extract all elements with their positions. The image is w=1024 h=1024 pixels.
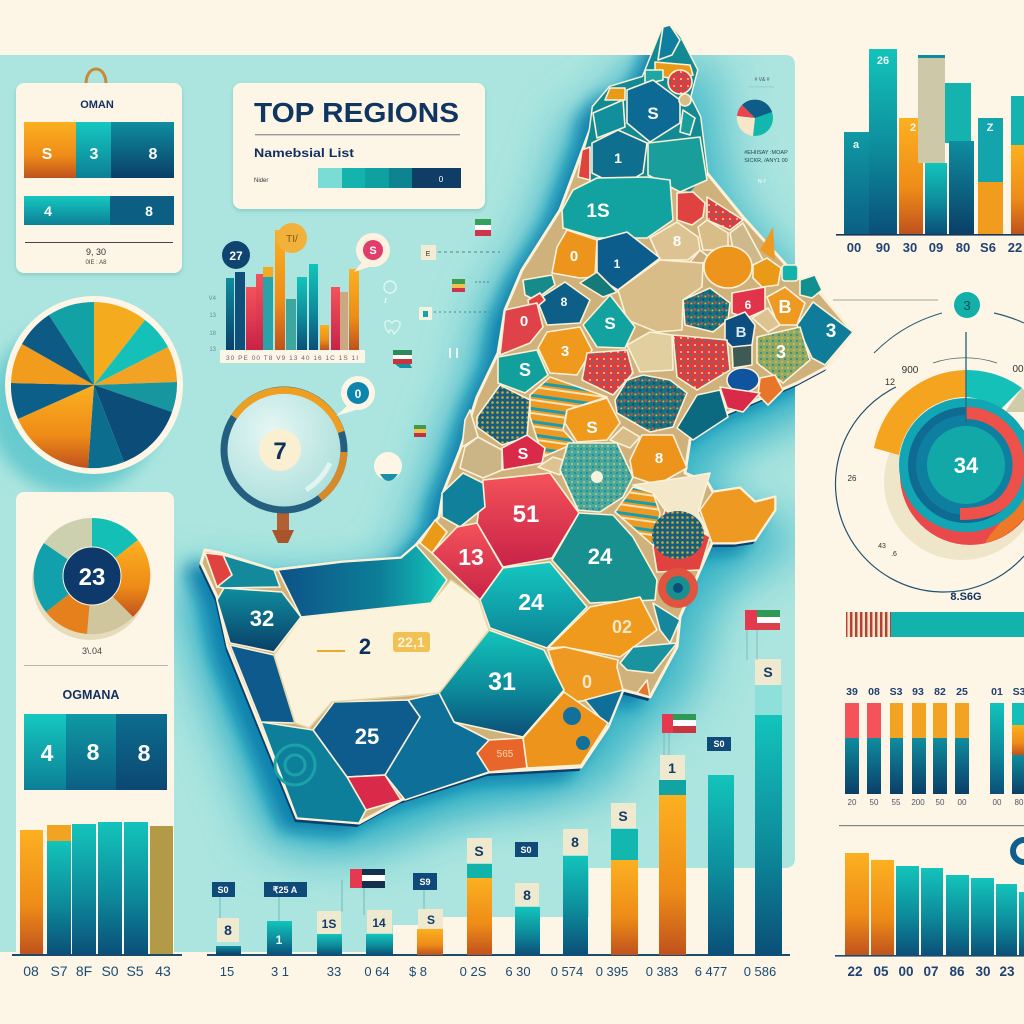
axis labels: 6 477 — [695, 964, 727, 979]
bar chart: top right: 30 — [903, 240, 917, 255]
donut caption: 3\.04 — [82, 646, 102, 656]
hook — [86, 69, 106, 84]
region numbers: S — [518, 446, 529, 463]
region numbers: 32 — [250, 606, 274, 631]
stacked columns: 80 — [1015, 798, 1024, 807]
stacked bar 2: 4 — [44, 203, 52, 219]
bubble: magnifier value: 0 — [355, 387, 362, 401]
card: Oman — [16, 69, 182, 273]
region numbers: 1 — [614, 257, 621, 271]
bar chart: bottom right: 00 — [898, 964, 914, 979]
small pie, top right of panel: N-7 — [758, 179, 766, 185]
stacked columns: 200 — [911, 798, 925, 807]
bar chart: bottom right: 30 — [975, 964, 991, 979]
region numbers: 31 — [488, 668, 516, 696]
value labels: 8 — [571, 834, 579, 850]
bubble: magnifier value — [336, 376, 375, 416]
region numbers: 02 — [612, 617, 632, 637]
region numbers: B — [736, 324, 747, 341]
region numbers: S — [586, 418, 598, 437]
stacked columns: 39 — [846, 686, 858, 698]
region numbers: 8 — [673, 233, 681, 250]
gold tag in central region: 22,1 — [397, 634, 425, 650]
axis labels — [220, 964, 776, 979]
bar chart: top right: S6 — [980, 240, 996, 255]
badge: 3 — [963, 298, 971, 313]
region numbers: S — [604, 314, 616, 333]
stacked columns: 50 — [936, 798, 945, 807]
region numbers: 3 — [776, 342, 786, 362]
map shadow — [173, 37, 879, 849]
circle marker — [1013, 840, 1024, 862]
region numbers: S — [647, 104, 659, 123]
region numbers: 565 — [497, 749, 514, 760]
axis labels: 0 2S — [460, 964, 487, 979]
axis labels: $ 8 — [409, 964, 427, 979]
bar chart: bottom left: S7 — [50, 963, 68, 979]
region numbers: 51 — [513, 501, 539, 528]
y labels — [209, 296, 217, 353]
stacked columns: 00 — [993, 798, 1002, 807]
teal map panel — [0, 55, 795, 952]
region numbers: 6 — [745, 298, 752, 312]
region numbers: B — [778, 297, 792, 317]
small pie, top right of panel: #EHIISAY :MOAP — [744, 150, 788, 156]
bubble: pink: S — [369, 245, 377, 257]
magnifier: 7 — [273, 438, 287, 465]
stacked columns — [845, 686, 1024, 807]
y labels: V4 — [209, 296, 217, 302]
value labels: 1S — [322, 917, 336, 931]
bar chart: bottom left — [12, 822, 182, 979]
axis labels: 0 395 — [596, 964, 628, 979]
stacked columns: 25 — [956, 686, 968, 698]
triple stat bar: 4 — [41, 740, 54, 766]
heading card: top regions: Nider — [254, 178, 268, 184]
stacked bar 1: S — [42, 146, 53, 163]
value labels: 8 — [523, 887, 531, 903]
bar chart: bottom left: 08 — [23, 963, 39, 979]
region numbers: 3 — [561, 343, 569, 360]
flag 3 — [745, 610, 780, 660]
magnifier — [224, 390, 344, 543]
map of regions — [199, 25, 853, 827]
stacked columns: 20 — [848, 798, 857, 807]
card: Oman: 9, 30 — [86, 247, 106, 257]
bar chart: bottom centre: ₹25 A — [273, 885, 298, 895]
region numbers: 2 — [359, 634, 371, 659]
value labels — [217, 659, 781, 942]
value labels: S — [474, 843, 484, 859]
value labels: 8 — [224, 922, 232, 938]
axis labels: 0 574 — [551, 964, 583, 979]
bar chart: top right: 00 — [847, 240, 861, 255]
region numbers: 3 — [826, 321, 836, 342]
bar chart: bottom right: 22 — [847, 964, 863, 979]
radial gauge: 12 — [885, 377, 895, 387]
bar chart: bottom centre: S0 — [217, 885, 229, 895]
bar chart: bottom right: 23 — [999, 964, 1015, 979]
gauge caption: 8.S6G — [950, 591, 982, 603]
flag 2 — [662, 714, 696, 755]
axis labels: 0 383 — [646, 964, 678, 979]
bar chart: bottom left: S0 — [101, 963, 119, 979]
bar chart: bottom right: 07 — [923, 964, 939, 979]
tag E — [421, 245, 500, 260]
stacked columns: 82 — [934, 686, 946, 698]
bar chart: top right: 26 — [877, 55, 889, 67]
region numbers — [250, 104, 836, 760]
region numbers: 8 — [655, 450, 663, 467]
donut chart — [32, 518, 150, 640]
stacked columns: 93 — [912, 686, 924, 698]
card: Oman: 0IE : A8 — [85, 260, 107, 266]
bubble: orange: TI/ — [286, 234, 298, 245]
bar chart: bottom right: 86 — [949, 964, 965, 979]
region numbers: S — [519, 360, 531, 380]
bar chart: top right: 09 — [929, 240, 943, 255]
pie shadow — [0, 322, 160, 494]
stacked columns: 50 — [870, 798, 879, 807]
handle — [272, 511, 294, 543]
bubble: orange — [277, 223, 307, 253]
stacked bar 1 — [24, 122, 174, 178]
y labels: 18 — [209, 331, 217, 337]
region numbers: 1S — [586, 201, 610, 222]
legend bar: 0 — [439, 175, 444, 184]
bar chart: bottom right — [835, 840, 1024, 979]
axis labels: 0 64 — [364, 964, 390, 979]
stacked bar 2 — [24, 196, 174, 225]
pie chart — [5, 296, 183, 474]
region numbers: 13 — [458, 544, 484, 570]
legend bar — [318, 168, 461, 188]
bar chart: centre top — [209, 223, 390, 363]
bar chart: top right: Z — [987, 122, 994, 134]
heading card: top regions: Namebsial List — [254, 146, 354, 160]
bar chart: bottom left: 43 — [155, 963, 171, 979]
radial gauge: 26 — [848, 474, 857, 483]
stacked bar 2: 8 — [145, 203, 153, 219]
flags and leader lines — [384, 219, 500, 437]
progress bar — [846, 612, 1024, 637]
bar chart: top right — [836, 49, 1024, 255]
heading card: top regions — [233, 83, 485, 209]
radial gauge: 900 — [902, 365, 919, 376]
bar chart: top right: 2 — [910, 122, 916, 134]
bar chart: bottom left: S5 — [126, 963, 144, 979]
region numbers: 24 — [588, 544, 613, 569]
axis labels: 15 — [220, 964, 234, 979]
axis strip — [220, 350, 365, 363]
radial gauge: 34 — [954, 453, 979, 478]
small pie, top right of panel: SICKR, /ANY1 00 — [744, 158, 788, 164]
radial gauge: 43 — [878, 543, 886, 550]
axis labels: 0 586 — [744, 964, 776, 979]
flag 1 — [350, 869, 385, 888]
stacked columns: 08 — [868, 686, 880, 698]
bar chart: bottom centre: S0 — [520, 845, 532, 855]
title: TOP REGIONS — [254, 97, 459, 128]
bubble: white marker — [374, 452, 402, 481]
bar chart: bottom right: 05 — [873, 964, 889, 979]
stacked bar 1: 8 — [149, 146, 158, 163]
bubble: pink — [354, 233, 390, 272]
small pie, top right of panel: # V& # — [754, 77, 770, 83]
bar chart: top right: 90 — [876, 240, 890, 255]
stacked columns: 55 — [892, 798, 901, 807]
stacked columns: 01 — [991, 686, 1003, 698]
bar chart: bottom centre: S9 — [419, 877, 431, 887]
bubble: 27: 27 — [229, 249, 243, 263]
bar chart: bottom left: 8F — [76, 963, 92, 979]
axis labels: 6 30 — [505, 964, 531, 979]
region numbers: 25 — [355, 724, 379, 749]
radial gauge: .6 — [891, 551, 897, 558]
stacked columns: 00 — [958, 798, 967, 807]
tag E: E — [426, 251, 431, 258]
bar chart: bottom centre: 1 — [276, 933, 283, 947]
triple stat bar — [24, 714, 167, 790]
region numbers: 8 — [561, 295, 568, 309]
bar chart: bottom centre: S0 — [713, 739, 725, 749]
badge — [954, 292, 980, 318]
triple stat bar: 8 — [87, 739, 100, 765]
card: Oman: OMAN — [80, 99, 114, 111]
region numbers: 0 — [570, 248, 578, 265]
label: Ogmana: OGMANA — [63, 688, 119, 702]
region numbers: 24 — [518, 589, 544, 615]
stacked columns: S3 — [890, 686, 903, 698]
gold tag in central region — [317, 632, 430, 652]
value labels: S — [427, 913, 435, 927]
region numbers: 1 — [614, 150, 622, 166]
value labels: S — [763, 664, 773, 680]
axis labels: 3 1 — [271, 964, 289, 979]
bar chart: centre top: 30 PE 00 T8 V9 13 40 16 1C 1S 1I — [226, 355, 358, 362]
bar chart: bottom centre — [207, 610, 790, 979]
y labels: 13 — [209, 347, 217, 353]
value labels: 1 — [668, 760, 676, 776]
axis labels: 33 — [327, 964, 341, 979]
donut chart: 23 — [79, 564, 105, 591]
region numbers: 0 — [582, 672, 592, 692]
small pie, top right of panel — [737, 77, 788, 185]
bar chart: top right: 80 — [956, 240, 970, 255]
value labels: S — [618, 808, 628, 824]
tags — [212, 737, 731, 897]
value labels: 14 — [372, 916, 386, 930]
region numbers: 0 — [520, 313, 528, 330]
triple stat bar: 8 — [138, 740, 151, 766]
y labels: 13 — [209, 313, 217, 319]
radial gauge: 00 — [1012, 364, 1024, 375]
radial gauge — [833, 292, 1024, 592]
bubble: 27 — [222, 241, 250, 269]
left panel — [16, 492, 174, 962]
bar chart: top right: 22 — [1008, 240, 1022, 255]
bar chart: top right: a — [853, 139, 860, 151]
stacked bar 1: 3 — [90, 146, 99, 163]
